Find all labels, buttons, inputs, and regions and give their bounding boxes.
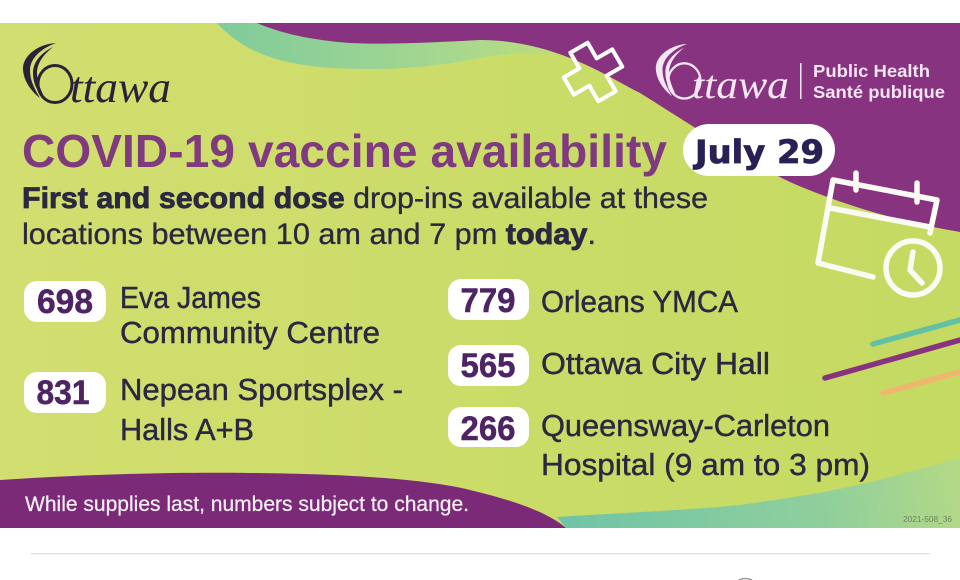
location: Eva James Community Centre: Eva James bbox=[120, 280, 261, 315]
top teal wave bbox=[217, 23, 600, 69]
location: Orleans YMCA: Orleans YMCA bbox=[541, 284, 738, 319]
location: Ottawa City Hall bbox=[448, 345, 770, 386]
Ottawa Public Health logo white bbox=[656, 44, 945, 107]
footer note: While supplies last, numbers subject to change. bbox=[25, 492, 469, 516]
icon: calendar with clock bbox=[818, 173, 940, 295]
location: Ottawa City Hall: Ottawa City Hall bbox=[541, 346, 770, 381]
decorative coloured lines bbox=[825, 320, 960, 393]
location: Eva James Community Centre: 698 bbox=[37, 283, 93, 321]
date pill bbox=[683, 124, 835, 176]
location: Queensway-Carleton Hospital: Queensway-Carleton bbox=[541, 408, 830, 443]
location: Orleans YMCA bbox=[448, 279, 738, 320]
Ottawa Public Health logo white: Public Health bbox=[813, 61, 930, 81]
location: Nepean Sportsplex: Halls A+B bbox=[120, 412, 254, 447]
reference code: 2021-508_36 bbox=[903, 515, 953, 524]
location: Nepean Sportsplex: Nepean Sportsplex - bbox=[120, 372, 403, 407]
location: Queensway-Carleton Hospital: 266 bbox=[460, 410, 516, 448]
location: Ottawa City Hall: 565 bbox=[460, 347, 516, 385]
bottom purple footer panel bbox=[0, 473, 566, 528]
intro text bbox=[22, 182, 708, 251]
bottom teal wave bbox=[557, 457, 960, 528]
location: Eva James Community Centre: Community Centre bbox=[120, 315, 380, 350]
Ottawa logo dark bbox=[23, 43, 171, 112]
Ottawa logo dark: ttawa bbox=[70, 63, 171, 112]
location: Nepean Sportsplex bbox=[24, 372, 403, 447]
location: Queensway-Carleton Hospital: Hospital (9 am to 3 pm) bbox=[541, 447, 870, 482]
intro text: locations between 10 am and 7 pm today. bbox=[22, 218, 596, 251]
location: Eva James Community Centre bbox=[24, 280, 380, 350]
location: Nepean Sportsplex: 831 bbox=[36, 374, 90, 412]
location: Queensway-Carleton Hospital bbox=[448, 407, 870, 482]
location: Orleans YMCA: 779 bbox=[460, 282, 516, 320]
date pill: July 29 bbox=[693, 133, 824, 171]
Ottawa Public Health logo white: ttawa bbox=[692, 62, 789, 107]
Ottawa Public Health logo white: Santé publique bbox=[813, 82, 945, 102]
icon: medical cross bbox=[555, 34, 631, 110]
top right purple wave bbox=[257, 23, 960, 232]
title: COVID-19 vaccine availability bbox=[22, 125, 667, 177]
intro text: First and second dose drop-ins available at these bbox=[22, 182, 708, 215]
